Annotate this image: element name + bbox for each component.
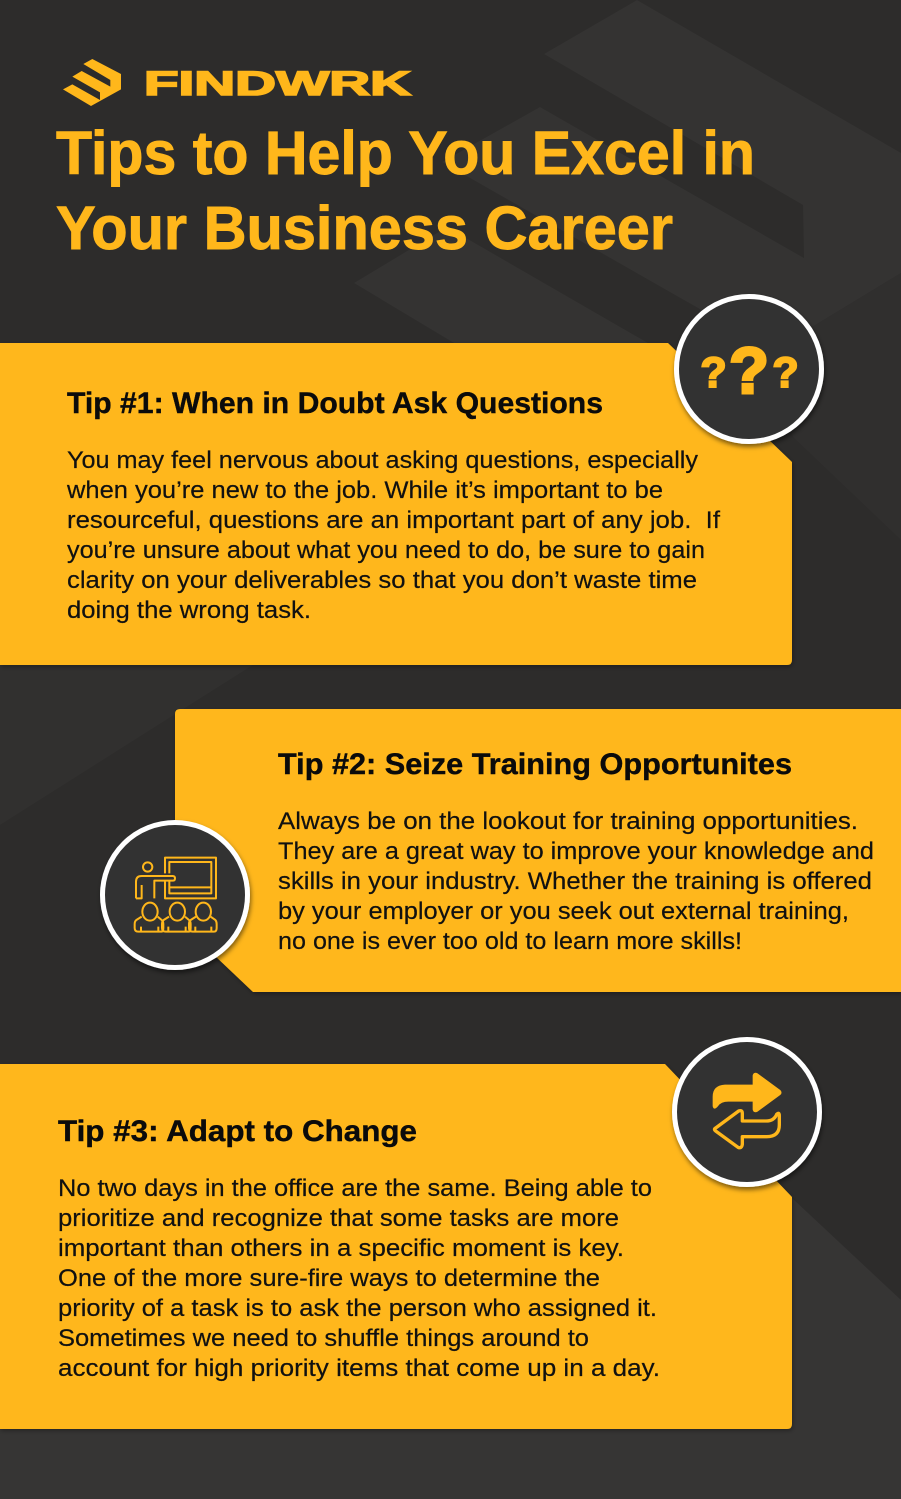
icon: question marks	[676, 296, 822, 442]
body text: account for high priority items that come up in a day.	[58, 1355, 660, 1382]
icon: question marks: ?	[729, 334, 769, 407]
body text: important than others in a specific moment is key.	[58, 1235, 624, 1262]
body text: clarity on your deliverables so that you don’t waste time	[67, 567, 697, 594]
heading: Tip #3: Adapt to Change	[58, 1115, 417, 1148]
body text: no one is ever too old to learn more skills!	[278, 928, 742, 955]
body text: prioritize and recognize that some tasks are more	[58, 1205, 619, 1232]
title	[56, 119, 755, 262]
body text	[278, 808, 874, 955]
body text: you’re unsure about what you need to do, be sure to gain	[67, 537, 705, 564]
title: Your Business Career	[56, 194, 673, 262]
body text	[58, 1175, 660, 1382]
body text: when you’re new to the job. While it’s important to be	[66, 477, 663, 504]
body text: skills in your industry. Whether the training is offered	[278, 868, 872, 895]
panel: tip 3	[0, 1040, 820, 1429]
panel: tip 2	[102, 709, 901, 992]
logo wordmark: FINDWRK	[144, 65, 412, 103]
body text: by your employer or you seek out external training,	[278, 898, 849, 925]
heading: Tip #1: When in Doubt Ask Questions	[67, 387, 603, 420]
body text: doing the wrong task.	[67, 597, 311, 624]
body text	[66, 447, 720, 624]
panel background	[0, 1064, 792, 1429]
title: Tips to Help You Excel in	[56, 119, 755, 187]
icon: question marks: ?	[700, 349, 727, 397]
body text: You may feel nervous about asking questions, especially	[67, 447, 698, 474]
logo	[63, 59, 412, 106]
heading: Tip #2: Seize Training Opportunites	[278, 748, 792, 781]
body text: Always be on the lookout for training opportunities.	[278, 808, 858, 835]
body text: They are a great way to improve your knowledge and	[278, 838, 874, 865]
icon: swap arrows	[674, 1040, 820, 1184]
icon: question marks: ?	[772, 349, 799, 397]
icon: logo mark	[63, 59, 121, 106]
body text: resourceful, questions are an important part of any job. If	[67, 507, 720, 534]
body text: One of the more sure-fire ways to determine the	[58, 1265, 600, 1292]
panel: tip 1	[0, 296, 822, 665]
body text: priority of a task is to ask the person who assigned it.	[58, 1295, 657, 1322]
body text: Sometimes we need to shuffle things around to	[58, 1325, 589, 1352]
panel background	[0, 343, 792, 665]
panel background	[175, 709, 901, 992]
body text: No two days in the office are the same. Being able to	[58, 1175, 652, 1202]
icon: training class	[102, 822, 248, 968]
